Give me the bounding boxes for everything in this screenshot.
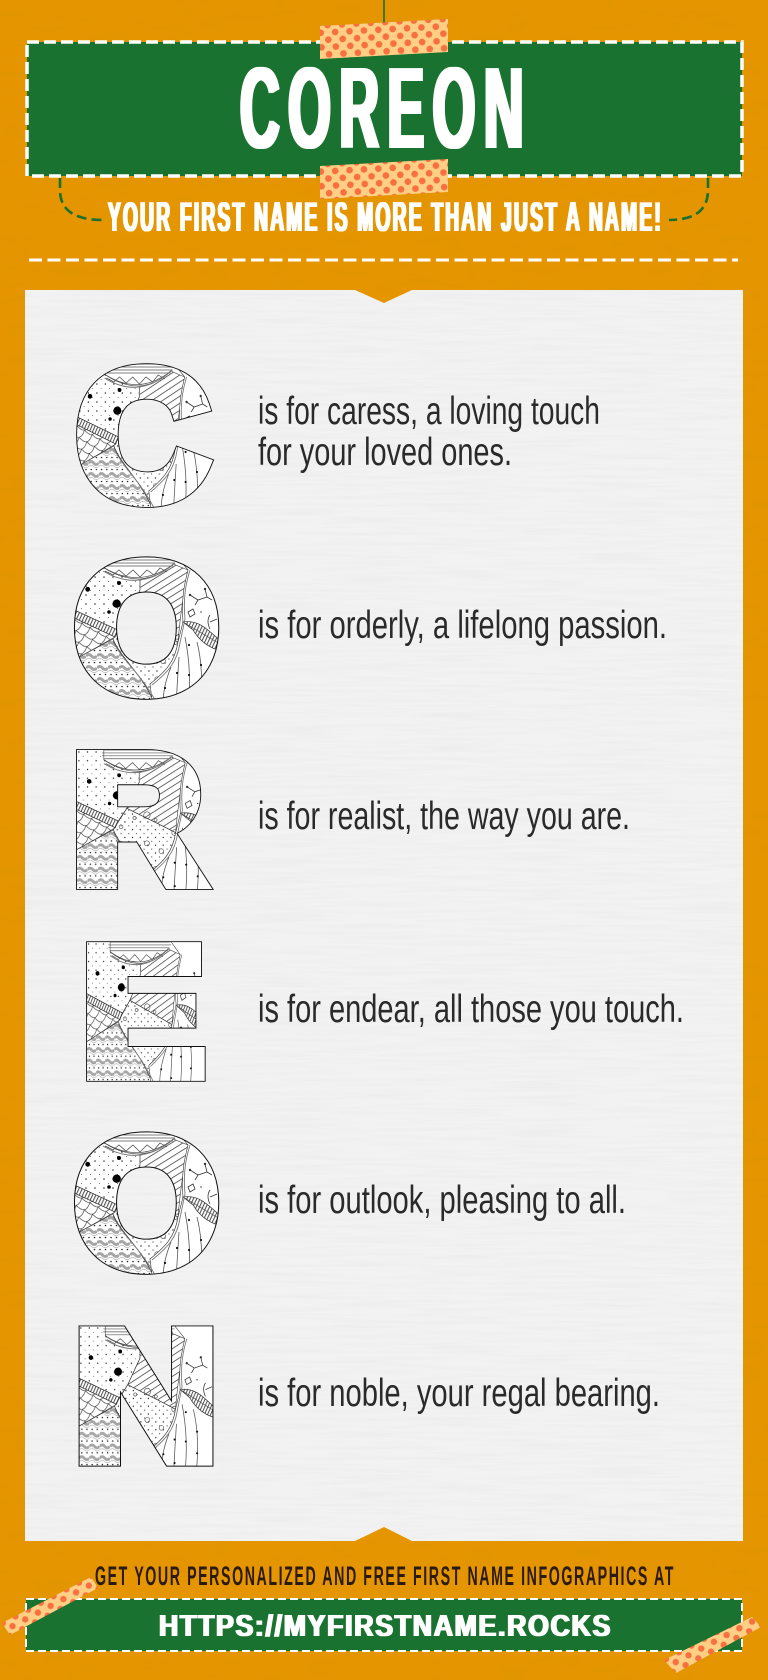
letter C: C [77, 334, 209, 537]
text C [258, 390, 600, 474]
dashed connector left [60, 178, 103, 220]
url: HTTPS://MYFIRSTNAME.ROCKS [159, 1608, 612, 1643]
letter R [76, 749, 214, 890]
letter O second: O [74, 1102, 219, 1304]
notch top [355, 290, 412, 303]
letter E [86, 941, 206, 1082]
tape: footer left [2, 1577, 98, 1635]
letter C [76, 363, 214, 508]
tape: top [320, 19, 448, 59]
text C: is for caress, a loving touch [258, 390, 600, 433]
dashed connector right [669, 178, 708, 220]
letter E: E [82, 910, 205, 1113]
hanging line [383, 0, 385, 26]
notch bottom [355, 1527, 412, 1541]
tape: footer right [664, 1617, 761, 1673]
text O second: is for outlook, pleasing to all. [258, 1179, 626, 1222]
letter O: O [74, 527, 219, 729]
text C: for your loved ones. [258, 431, 512, 474]
letter R: R [72, 717, 203, 921]
footer banner [26, 1599, 742, 1651]
letter N [78, 1326, 214, 1468]
title banner [27, 42, 742, 176]
tape: bottom [320, 159, 448, 199]
panel: letters [25, 290, 743, 1541]
text R: is for realist, the way you are. [258, 795, 630, 838]
letter N: N [74, 1293, 219, 1498]
dashed divider [29, 258, 738, 262]
